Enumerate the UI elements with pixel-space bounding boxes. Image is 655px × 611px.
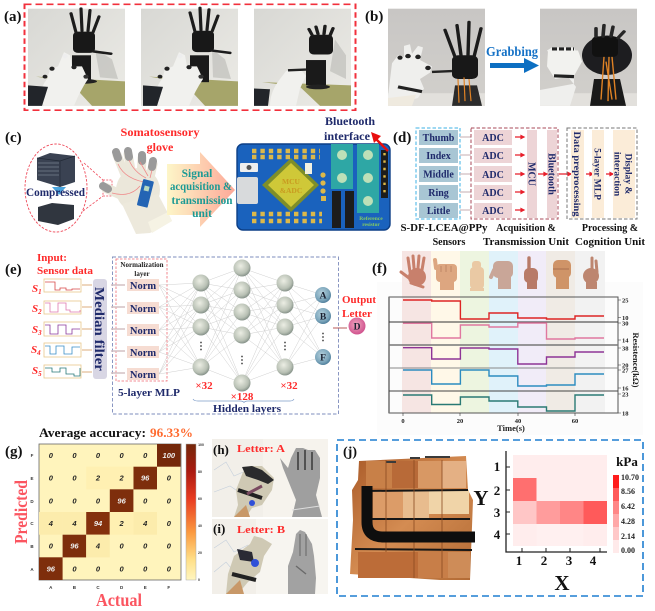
- right axis tick labels: 23: [622, 392, 629, 398]
- caption: processing and cognition unit: [575, 223, 646, 248]
- block group: processing and cognition: 5-layer MLP: [592, 148, 602, 200]
- x axis ticks: 20: [457, 418, 463, 425]
- callout: compressed foam ellipse: [25, 144, 112, 232]
- panel label: (f): (f): [372, 261, 387, 277]
- multipliers: ×32: [195, 380, 213, 392]
- sensor inputs S1 to S5: S: [32, 365, 38, 377]
- label: Bluetooth interface: interface: [324, 131, 370, 143]
- heading: average accuracy: Average accuracy:: [39, 426, 146, 440]
- legend: kPa color scale: 6.42: [621, 502, 635, 511]
- photo: gloved fist: [234, 466, 274, 517]
- heatmap axes: 1: [494, 459, 500, 474]
- nodes: output letters: B: [320, 312, 327, 322]
- axis title: resistance: Resistence(kΩ): [631, 333, 641, 388]
- heading: input sensor data: Sensor data: [37, 265, 93, 277]
- cell values: 0: [96, 564, 101, 573]
- nodes: hidden layer 2: [234, 260, 250, 392]
- heading: glove: glove: [147, 140, 174, 154]
- nodes: output letters: [315, 287, 331, 365]
- cell values: 0: [49, 496, 54, 505]
- cell values: 94: [94, 519, 103, 528]
- icon: two fingers up: [583, 258, 599, 289]
- block group: sensors: Ring: [428, 188, 449, 199]
- multipliers: ×32: [280, 380, 298, 392]
- cell values: 0: [167, 496, 172, 505]
- cell values: 0: [96, 451, 101, 460]
- right axis tick labels: 14: [622, 338, 629, 344]
- label: Bluetooth interface: Bluetooth: [325, 116, 376, 128]
- block group: acquisition and transmission: ADC: [482, 151, 504, 162]
- color bar: 0: [198, 578, 200, 582]
- panel label: (g): (g): [5, 444, 22, 460]
- panel: (b) grabbing demonstration: [388, 9, 637, 106]
- label: Letter A: Letter: A: [237, 443, 285, 455]
- sensor inputs S1 to S5: [31, 279, 81, 378]
- block group: processing and cognition: [567, 128, 637, 219]
- cell values: 0: [96, 496, 101, 505]
- illustration: sensor glove: [103, 151, 172, 234]
- block group: acquisition and transmission: MCU: [526, 162, 536, 186]
- axis tick letters: F: [31, 453, 34, 458]
- label: normalization layer: layer: [134, 270, 150, 278]
- cell values: 0: [167, 542, 172, 551]
- label: hidden layers: Hidden layers: [213, 403, 282, 415]
- cell values: 0: [143, 496, 148, 505]
- photo: closed hand: [540, 9, 637, 106]
- photo: gloved hand: [226, 536, 272, 594]
- cell values: 0: [167, 474, 172, 483]
- illustration: circuit board: [237, 144, 390, 230]
- nodes: output letters: ⋮: [318, 332, 328, 343]
- callout: compressed foam ellipse: Compressed: [26, 187, 86, 199]
- block group: acquisition and transmission: ADC: [482, 133, 504, 144]
- x axis ticks: [401, 413, 578, 425]
- frame: 5-layer MLP: [112, 257, 338, 414]
- illustration: circuit board: &ADC: [280, 186, 302, 195]
- axis tick letters: E: [144, 585, 147, 590]
- sensor inputs S1 to S5: 4: [36, 349, 41, 357]
- frame: (j): [337, 440, 643, 596]
- photo: gesture 2: [141, 8, 238, 106]
- axis label: X: X: [554, 571, 570, 595]
- caption: acquisition and transmission unit: [483, 223, 570, 248]
- cell values: 0: [143, 451, 148, 460]
- trace: red: [403, 300, 604, 319]
- cell values: 0: [120, 451, 125, 460]
- block group: acquisition and transmission: [471, 128, 558, 219]
- panel: (i) letter B photo: [212, 519, 328, 594]
- heatmap axes: 2: [494, 483, 500, 498]
- sensor inputs S1 to S5: 3: [37, 329, 42, 337]
- cell values: 0: [120, 564, 125, 573]
- arrow: signal acquisition and transmission unit: acquisition &: [170, 181, 232, 193]
- block group: acquisition and transmission: Bluetooth: [546, 153, 556, 195]
- cell values: 2: [119, 474, 125, 483]
- heading: somatosensory glove: Somatosensory: [120, 125, 200, 139]
- axis title: time: Time(s): [497, 423, 525, 433]
- block group: norm layer: Norm: [130, 370, 156, 381]
- arrow: signal acquisition and transmission unit: unit: [192, 208, 212, 220]
- block group: acquisition and transmission: ADC: [482, 206, 504, 217]
- icon: open hand: [401, 256, 426, 287]
- cell values: 96: [47, 564, 56, 573]
- cell values: 0: [49, 451, 54, 460]
- cell values: 0: [72, 564, 77, 573]
- cell values: 0: [167, 564, 172, 573]
- label: normalization layer: Normalization: [120, 261, 164, 269]
- block group: sensors: [416, 128, 460, 219]
- panel: (c) somatosensory glove and acquisition board: [25, 116, 390, 234]
- block: median filter: Median filter: [91, 287, 106, 371]
- icon: fist A: [435, 260, 457, 290]
- chart frame: [389, 297, 618, 413]
- axis tick letters: D: [30, 499, 34, 504]
- nodes: hidden layer 1: ⋮: [196, 341, 206, 352]
- label: hidden layers: [193, 399, 294, 415]
- cell values: 0: [120, 542, 125, 551]
- color bar: 80: [198, 470, 202, 474]
- heatmap axes: 3: [494, 505, 501, 520]
- photo: gray flat hand: [288, 530, 316, 594]
- block group: processing and cognition: Display &: [622, 154, 632, 195]
- sensor inputs S1 to S5: 5: [38, 370, 42, 378]
- right axis tick labels: 10: [622, 315, 628, 322]
- caption: processing and cognition unit: Cognition Unit: [575, 237, 646, 248]
- panel label: (e): (e): [5, 262, 22, 278]
- cell values: [47, 451, 176, 573]
- cell values: 0: [167, 519, 172, 528]
- cell values: 96: [141, 474, 150, 483]
- x axis ticks: 60: [572, 418, 578, 425]
- heatmap axes: 2: [541, 553, 547, 568]
- axis title: predicted: Predicted: [11, 480, 31, 544]
- heatmap axes: 4: [494, 527, 501, 542]
- sensor inputs S1 to S5: S: [31, 344, 37, 356]
- label: (h): (h): [213, 442, 229, 457]
- panel: (e) neural network: [31, 252, 376, 415]
- icon: closed fist F: [553, 260, 571, 289]
- sensor inputs S1 to S5: S: [32, 324, 38, 336]
- trace: pink: [403, 323, 604, 339]
- right axis tick labels: [618, 298, 629, 418]
- block group: norm layer: Norm: [130, 304, 156, 315]
- arrow: signal acquisition and transmission unit: [167, 152, 235, 227]
- block group: processing and cognition: interaction: [612, 152, 622, 197]
- heatmap axes: 1: [516, 553, 522, 568]
- caption: sensors: S-DF-LCEA@PPy: [400, 223, 488, 234]
- axis tick letters: D: [120, 585, 124, 590]
- cell values: 0: [72, 474, 77, 483]
- right axis tick labels: 27: [622, 368, 629, 374]
- cell values: 96: [70, 542, 79, 551]
- block group: acquisition and transmission: ADC: [482, 170, 504, 181]
- right axis tick labels: 30: [622, 320, 628, 328]
- heatmap axes: 3: [566, 553, 573, 568]
- cell values: 0: [143, 542, 148, 551]
- legend: kPa color scale: [613, 454, 639, 555]
- x axis ticks: 40: [515, 418, 521, 425]
- gesture color bands: [402, 251, 605, 413]
- nodes: hidden layer 3: ⋮: [280, 341, 290, 352]
- photo: copper sensor array: [350, 456, 475, 580]
- trace: green: [403, 395, 604, 411]
- heading: average accuracy: 96.33%: [150, 426, 193, 440]
- gesture hand icons: [401, 256, 599, 291]
- illustration: circuit board: MCU: [282, 177, 301, 186]
- axis tick letters: B: [73, 585, 77, 590]
- block group: norm layer: Norm: [130, 348, 156, 359]
- color bar: 60: [198, 497, 202, 501]
- output letter: Output: [342, 294, 376, 306]
- axis tick letters: C: [30, 521, 34, 526]
- cell values: 100: [163, 451, 176, 460]
- block group: acquisition and transmission: ADC: [482, 188, 504, 199]
- heading: input sensor data: Input:: [37, 252, 67, 264]
- heading: input sensor data: [37, 252, 93, 277]
- caption: processing and cognition unit: Processing &: [582, 223, 638, 234]
- multipliers: ×128: [231, 391, 254, 403]
- color bar: 20: [198, 551, 202, 555]
- color bar: 100: [198, 443, 204, 447]
- diagonal and tinted cells: [39, 444, 181, 580]
- nodes: hidden layer 2: ⋮: [237, 355, 247, 366]
- right axis tick labels: 25: [622, 298, 629, 304]
- sensor inputs S1 to S5: S: [32, 303, 38, 315]
- cell values: 4: [142, 519, 148, 528]
- cell values: 0: [72, 451, 77, 460]
- right axis tick labels: 18: [622, 410, 629, 418]
- block group: sensors: Thumb: [423, 133, 455, 144]
- nodes: hidden layer 3: [276, 274, 294, 376]
- x axis ticks: 0: [401, 418, 405, 425]
- arrows: sensor to filter: [82, 285, 92, 372]
- panel label: (c): (c): [5, 130, 22, 146]
- cell values: 2: [119, 519, 125, 528]
- sensor inputs S1 to S5: 1: [38, 288, 42, 296]
- panel: (f) resistance time series: [377, 251, 643, 435]
- illustration: circuit board: Reference: [359, 216, 383, 222]
- icon: curled fingers D: [491, 261, 513, 289]
- legend: kPa color scale: kPa: [616, 454, 638, 469]
- label: Bluetooth interface: [324, 116, 388, 151]
- cell values: 0: [143, 564, 148, 573]
- legend: kPa color scale: 10.70: [621, 473, 639, 482]
- dashed frame: (a): [24, 4, 356, 110]
- cell values: 0: [49, 542, 54, 551]
- photo: gesture 3: [254, 9, 351, 106]
- axis tick letters: [30, 453, 170, 590]
- output letter: [333, 294, 376, 334]
- color bar: [186, 443, 204, 582]
- photo: gesture 1: [28, 9, 125, 106]
- axis tick letters: F: [167, 585, 170, 590]
- caption: acquisition and transmission unit: Transmission Unit: [483, 237, 570, 248]
- panel label: (b): (b): [365, 9, 383, 25]
- panel: (j) pressure sensor array: [337, 440, 643, 596]
- photo: open hand: [388, 9, 485, 106]
- right axis tick labels: 20: [622, 362, 628, 370]
- icon: fingers up C: [470, 261, 484, 291]
- legend: kPa color scale: 8.56: [621, 487, 635, 496]
- caption: sensors: [400, 223, 488, 248]
- cell values: 2: [95, 474, 101, 483]
- axis tick letters: A: [30, 567, 34, 572]
- cell values: 96: [117, 496, 127, 505]
- block group: norm layer: Norm: [130, 281, 156, 292]
- legend: kPa color scale: 4.28: [621, 517, 635, 526]
- heatmap: [513, 455, 607, 546]
- trace: purple: [403, 348, 604, 364]
- network connections: [159, 268, 323, 383]
- label: normalization layer: [120, 261, 164, 278]
- right axis tick labels: 16: [622, 386, 629, 392]
- axis tick letters: A: [49, 585, 53, 590]
- axis tick letters: E: [30, 476, 34, 481]
- frame: normalization layer: [116, 259, 167, 381]
- sensor inputs S1 to S5: S: [32, 283, 38, 295]
- block group: norm layer: Norm: [130, 326, 156, 337]
- cell values: 0: [49, 474, 54, 483]
- arrows: data flow: [515, 136, 613, 212]
- label: Letter B: Letter: B: [237, 524, 286, 536]
- panel: (d) system block diagram: [400, 128, 646, 248]
- cell values: 4: [95, 542, 101, 551]
- heatmap axes: 4: [590, 553, 597, 568]
- multipliers: [195, 380, 298, 403]
- icon: index finger up E: [524, 258, 538, 289]
- panel label: (a): (a): [4, 9, 22, 25]
- block group: sensors: Index: [426, 151, 451, 162]
- color bar: 40: [198, 524, 202, 528]
- legend: kPa color scale: 2.14: [621, 532, 635, 541]
- block group: sensors: Middle: [423, 170, 454, 180]
- axis tick letters: C: [96, 585, 100, 590]
- panel label: (d): (d): [393, 130, 411, 146]
- axis tick letters: B: [30, 544, 34, 549]
- cell values: 4: [71, 519, 77, 528]
- block group: sensors: Little: [427, 206, 451, 217]
- photo: gray hand fist: [280, 448, 322, 517]
- arrow: signal acquisition and transmission unit: Signal: [182, 168, 212, 180]
- caption: acquisition and transmission unit: Acquisition &: [496, 223, 556, 234]
- axis title: actual: Actual: [96, 590, 142, 610]
- block group: processing and cognition: Data preprocessing: [571, 132, 581, 217]
- cell values: 0: [72, 496, 77, 505]
- nodes: hidden layer 1: [192, 274, 210, 376]
- heading: average accuracy: [39, 426, 193, 440]
- panel: (h) letter A photo: [212, 439, 328, 517]
- panel: (g) confusion matrix: [11, 443, 204, 610]
- heatmap axes: [494, 451, 607, 568]
- arrows: filter to norm: [111, 285, 125, 373]
- legend: kPa color scale: 0.00: [621, 546, 635, 555]
- icon: grabbing arrow: Grabbing: [486, 44, 538, 59]
- trace: blue: [403, 370, 604, 386]
- matrix background: [39, 444, 181, 580]
- label: 5-layer MLP: 5-layer MLP: [118, 387, 180, 399]
- caption: sensors: Sensors: [433, 237, 465, 248]
- cell values: 4: [48, 519, 54, 528]
- nodes: output letters: A: [320, 292, 327, 302]
- panel: (a) robot hand gesture photos: [24, 4, 356, 110]
- output letter: Letter: [342, 308, 372, 320]
- illustration: circuit board: resistor: [362, 222, 380, 228]
- right axis tick labels: 38: [622, 346, 629, 352]
- icon: grabbing arrow: [486, 44, 539, 73]
- arrows: sensors to ADC: [460, 137, 471, 210]
- label: (j): (j): [343, 445, 357, 460]
- axis label: Y: Y: [473, 486, 489, 510]
- label: (i): (i): [213, 521, 225, 536]
- output letter: D: [354, 322, 361, 332]
- block group: norm layer: [127, 279, 159, 381]
- arrow: signal acquisition and transmission unit: transmission: [172, 195, 233, 207]
- sensor inputs S1 to S5: 2: [37, 308, 42, 316]
- nodes: output letters: F: [320, 354, 326, 364]
